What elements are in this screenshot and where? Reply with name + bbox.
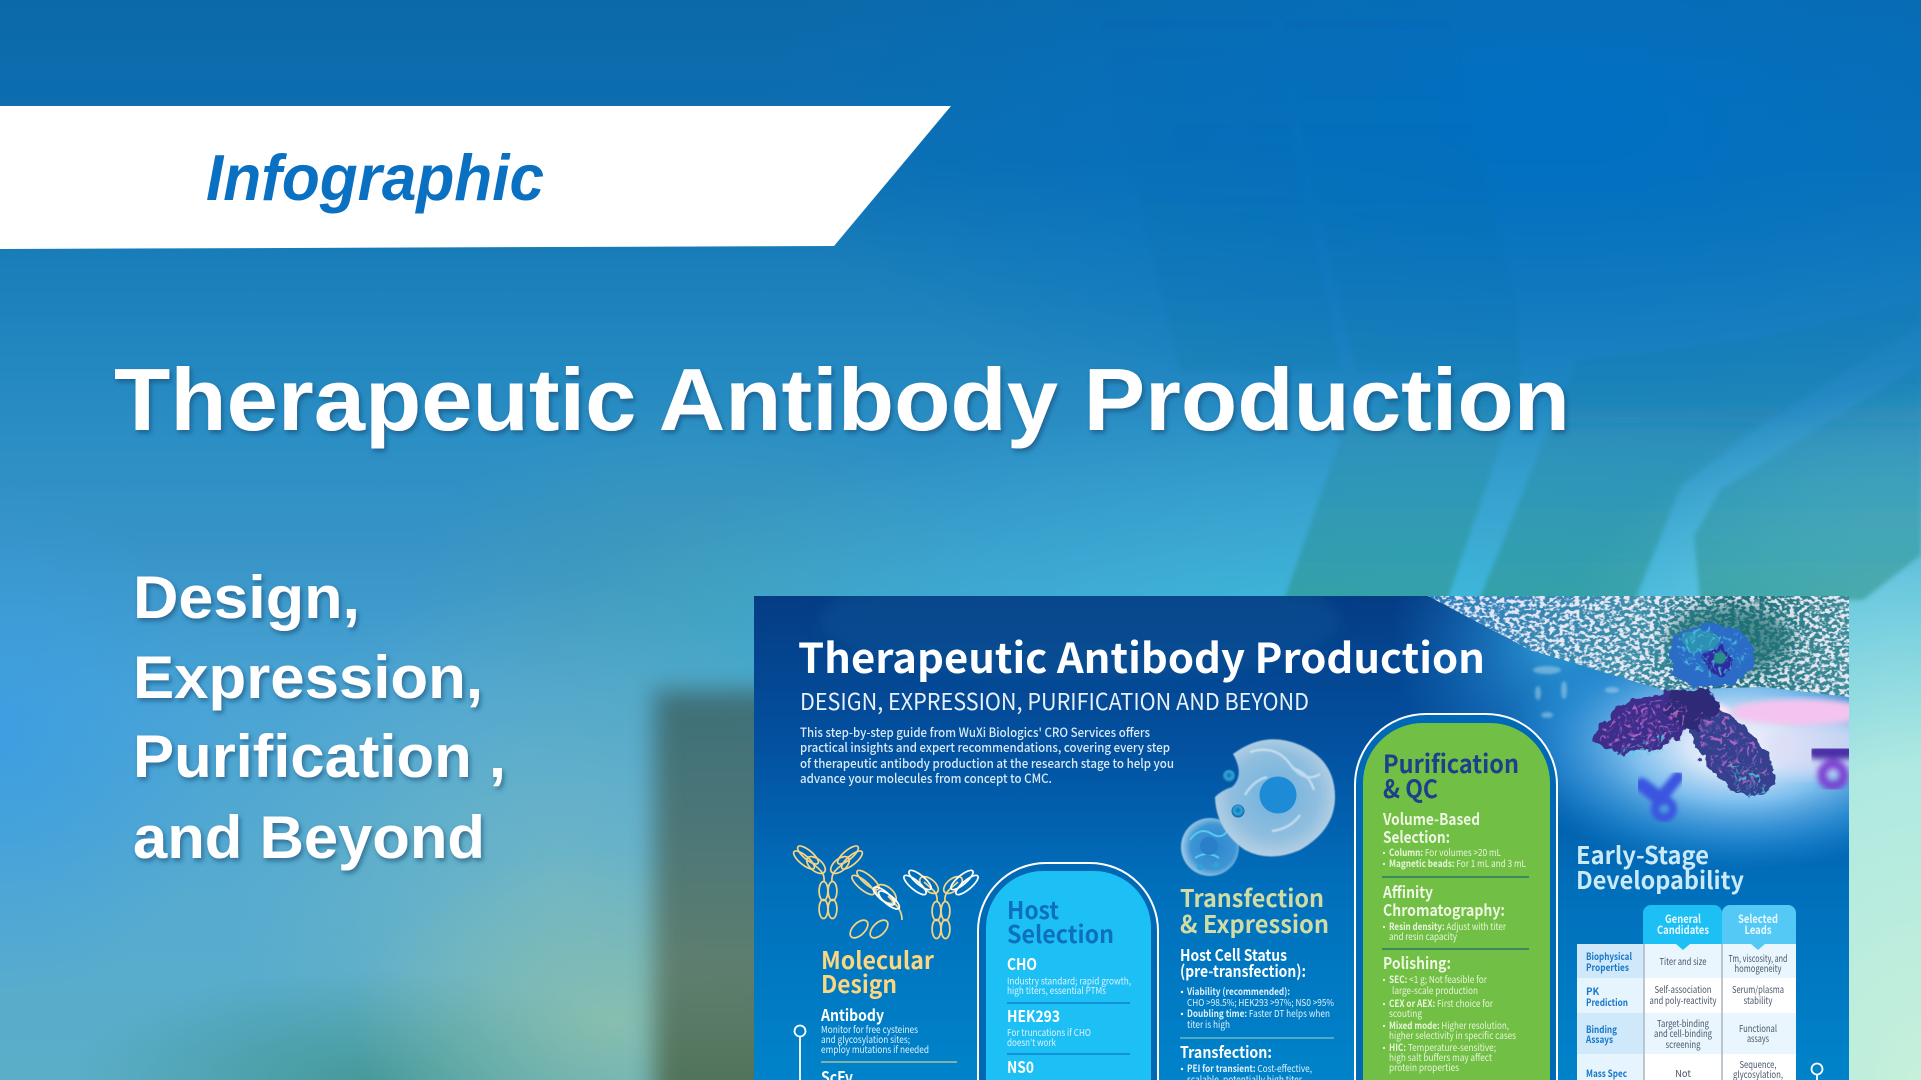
ghost antibody shapes in the background [1095,0,1921,600]
table: developability: stability [1744,993,1773,1007]
section: Molecular Design: Design [821,965,897,1000]
section: Transfection & Expression: Transfection [1180,879,1324,914]
panel: Purification & QC: protein properties [1389,1060,1459,1074]
section: Molecular Design: employ mutations if needed [821,1042,929,1056]
subtitle lines: Purification , [133,723,506,790]
faint particles [1533,666,1619,718]
blurred dark block behind panel [654,690,794,1080]
section: Early-Stage Developability heading: Early-Stage [1576,836,1709,871]
table: developability: Sequence, [1740,1057,1777,1071]
section: Transfection & Expression: PEI for transient: Cost-effective, [1187,1061,1312,1075]
table: developability: Titer and size [1660,954,1706,968]
section: Transfection & Expression: (pre-transfection): [1180,958,1306,982]
image: small blue antibody [1642,777,1678,818]
intro paragraph: This step-by-step guide from WuXi Biologics' CRO Services offers [800,722,1150,741]
panel: Purification & QC: Affinity [1382,879,1433,903]
table: developability [1577,905,1796,1080]
subtitle lines: Design, [133,564,360,631]
image: cell [1181,739,1335,876]
panel: Host Selection: Industry standard; rapid growth, [1007,974,1131,988]
section: Molecular Design: Monitor for free cysteines [821,1022,918,1036]
table: developability: screening [1666,1037,1701,1051]
panel: Host Selection [978,863,1158,1080]
section: Early-Stage Developability heading [1576,836,1744,896]
intro paragraph: practical insights and expert recommendations, covering every step [800,737,1170,756]
panel: Purification & QC: & QC [1383,770,1438,806]
table: developability: General [1665,911,1701,927]
panel: Purification & QC: SEC: <1 g; Not feasible for [1389,972,1487,986]
panel: Host Selection: Selection [1007,915,1114,950]
panel: Purification & QC: Volume-Based [1382,806,1480,830]
section: Transfection & Expression: Transfection: [1180,1039,1272,1063]
panel: Host Selection: NS0 [1007,1054,1034,1078]
section: Transfection & Expression: CHO >98.5%; HEK293 >97%; NS0 >95% [1187,995,1334,1009]
panel: Purification & QC: Chromatography: [1383,897,1505,921]
table: developability: Tm, viscosity, and [1728,951,1788,965]
table: developability: Self-association [1654,982,1712,996]
panel: Purification & QC: HIC: Temperature-sensitive; [1389,1040,1496,1054]
subtitle lines: Expression, [133,644,483,711]
subtitle lines: and Beyond [133,804,485,871]
table: developability: homogeneity [1734,961,1782,975]
table: developability: Serum/plasma [1732,982,1784,996]
table: developability: PK [1586,984,1600,998]
subtitle lines [133,564,506,871]
table: developability: Selected [1738,911,1778,927]
section: Molecular Design: Antibody [820,1002,884,1026]
panel: Host Selection: For truncations if CHO [1007,1025,1091,1039]
image: 3D antibody [1592,621,1776,800]
table: developability: Prediction [1586,995,1628,1009]
icon: gold antibody outlines [791,843,965,941]
image: membrane surface [1428,596,1849,697]
panel: Purification & QC: Polishing: [1383,950,1451,974]
panel: Purification & QC [1355,714,1557,1080]
panel: Purification & QC: high salt buffers may affect [1389,1050,1492,1064]
table: developability: Leads [1744,922,1772,938]
main title: Therapeutic Antibody Production [114,350,1570,449]
panel: Purification & QC: and resin capacity [1389,929,1457,943]
panel: Host Selection: doesn't work [1007,1035,1057,1049]
table: developability: Target-binding [1657,1016,1710,1030]
section: Transfection & Expression: Doubling time: Faster DT helps when [1187,1006,1330,1020]
panel: Purification & QC: large-scale production [1392,983,1478,997]
panel: embedded infographic [754,596,1849,1080]
section: Transfection & Expression: Viability (recommended): [1186,984,1290,998]
table: developability: Mass Spec [1586,1066,1627,1080]
panel: Purification & QC: Selection: [1383,824,1450,848]
image: blurred purple antibody at edge [1815,752,1849,786]
inner subtitle: DESIGN, EXPRESSION, PURIFICATION AND BEYOND [800,683,1309,717]
icon: timeline node [1812,1064,1822,1080]
panel: Purification & QC: Resin density: Adjust with titer [1389,919,1506,933]
panel: Purification & QC: higher selectivity in specific cases [1389,1028,1516,1042]
banner label: Infographic [206,141,544,214]
table: developability: assays [1747,1031,1769,1045]
panel: Host Selection: high titers, essential PTMs [1007,983,1106,997]
intro paragraph: of therapeutic antibody production at the research stage to help you [800,753,1174,772]
section: Transfection & Expression: & Expression [1180,905,1329,940]
table: developability: Biophysical [1586,949,1632,963]
section: Molecular Design: Molecular [821,941,935,976]
section: Early-Stage Developability heading: Developability [1576,861,1744,896]
panel: Host Selection: CHO [1007,951,1037,975]
table: developability: Functional [1739,1021,1777,1035]
section: Transfection & Expression [1180,879,1334,1080]
section: Transfection & Expression: titer is high [1187,1017,1230,1031]
section: Molecular Design [794,941,957,1080]
panel: Purification & QC: Mixed mode: Higher resolution, [1389,1018,1509,1032]
intro paragraph [800,722,1174,787]
panel: Purification & QC: Column: For volumes >20 mL [1389,845,1501,859]
table: developability: and cell-binding [1654,1026,1713,1040]
banner: white parallelogram [0,106,951,249]
intro paragraph: advance your molecules from concept to CMC. [800,768,1052,787]
inner title: Therapeutic Antibody Production [798,625,1485,685]
table: developability: Binding [1586,1022,1617,1036]
table: developability: and poly-reactivity [1650,993,1717,1007]
panel: Host Selection: Host [1007,891,1059,926]
panel: Purification & QC: scouting [1389,1006,1423,1020]
table: developability: Candidates [1657,922,1709,938]
section: Transfection & Expression: Host Cell Status [1180,942,1287,966]
panel: Purification & QC: CEX or AEX: First choice for [1389,996,1493,1010]
panel: Purification & QC: Purification [1383,745,1519,781]
panel: Host Selection: HEK293 [1007,1003,1060,1027]
section: Molecular Design: and glycosylation sites; [821,1032,910,1046]
table: developability: Not [1675,1066,1691,1080]
table: developability: Properties [1586,960,1629,974]
panel: Purification & QC: Magnetic beads: For 1 mL and 3 mL [1389,856,1526,870]
table: developability: Assays [1585,1032,1613,1046]
